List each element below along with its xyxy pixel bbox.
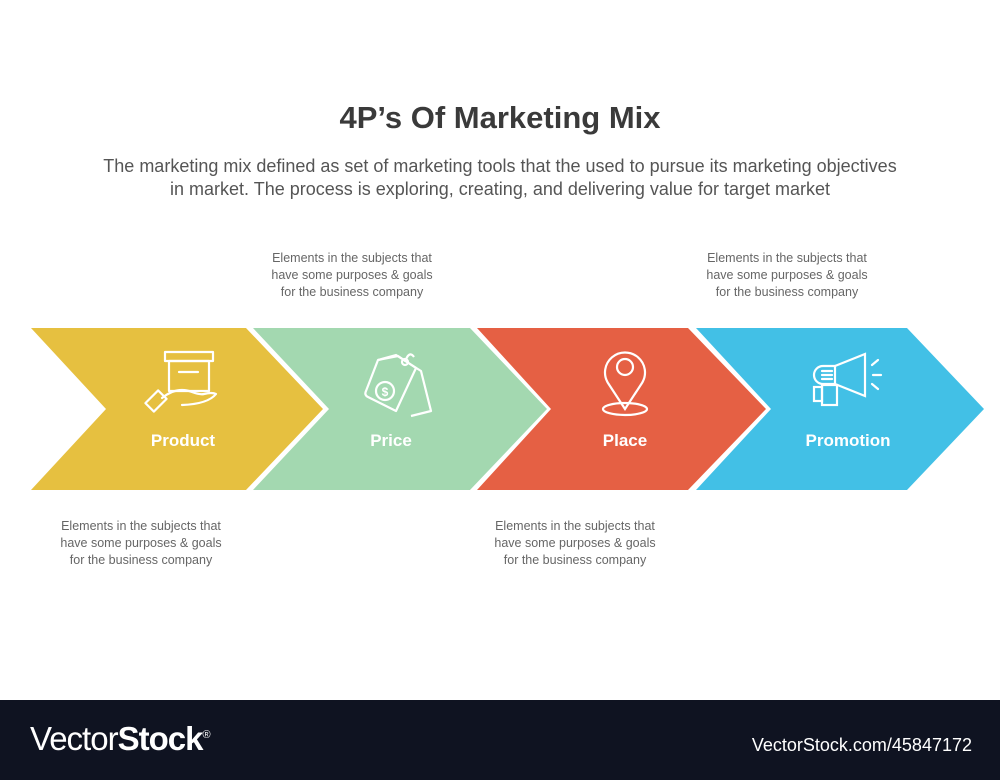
note: promotion xyxy=(706,251,868,299)
note: price xyxy=(271,251,433,299)
chevron: product: Product xyxy=(151,431,215,450)
chevron: promotion: Promotion xyxy=(806,431,890,450)
chevron: product xyxy=(31,328,323,490)
note: promotion: Elements in the subjects that xyxy=(707,251,867,265)
note: promotion: have some purposes & goals xyxy=(706,268,868,282)
icon: box in hand xyxy=(145,352,216,412)
chevron: place xyxy=(477,328,766,490)
icon: megaphone xyxy=(814,354,881,405)
note: place: for the business company xyxy=(504,553,646,567)
icon: map pin xyxy=(603,352,647,415)
note: price: have some purposes & goals xyxy=(271,268,433,282)
chevron: price: Price xyxy=(370,431,412,450)
note: place xyxy=(494,519,656,567)
chevron: promotion xyxy=(696,328,984,490)
note: product: for the business company xyxy=(70,553,212,567)
subtitle: in market. The process is exploring, creating, and delivering value for target market xyxy=(170,179,830,199)
chevron: price xyxy=(253,328,547,490)
note: product xyxy=(60,519,222,567)
subtitle xyxy=(103,156,897,199)
note: product: Elements in the subjects that xyxy=(61,519,221,533)
footer id: VectorStock.com/45847172 xyxy=(752,735,972,755)
note: promotion: for the business company xyxy=(716,285,858,299)
footer bar xyxy=(0,700,1000,780)
note: product: have some purposes & goals xyxy=(60,536,222,550)
note: price: Elements in the subjects that xyxy=(272,251,432,265)
note: place: have some purposes & goals xyxy=(494,536,656,550)
icon: price tag: $ xyxy=(382,385,389,399)
note: place: Elements in the subjects that xyxy=(495,519,655,533)
icon: price tag xyxy=(365,354,431,416)
title: 4P’s Of Marketing Mix xyxy=(340,100,660,135)
chevron: place: Place xyxy=(603,431,647,450)
footer logo: VectorStock® xyxy=(30,720,210,757)
note: price: for the business company xyxy=(281,285,423,299)
subtitle: The marketing mix defined as set of marketing tools that the used to pursue its marketing objectives xyxy=(103,156,897,176)
